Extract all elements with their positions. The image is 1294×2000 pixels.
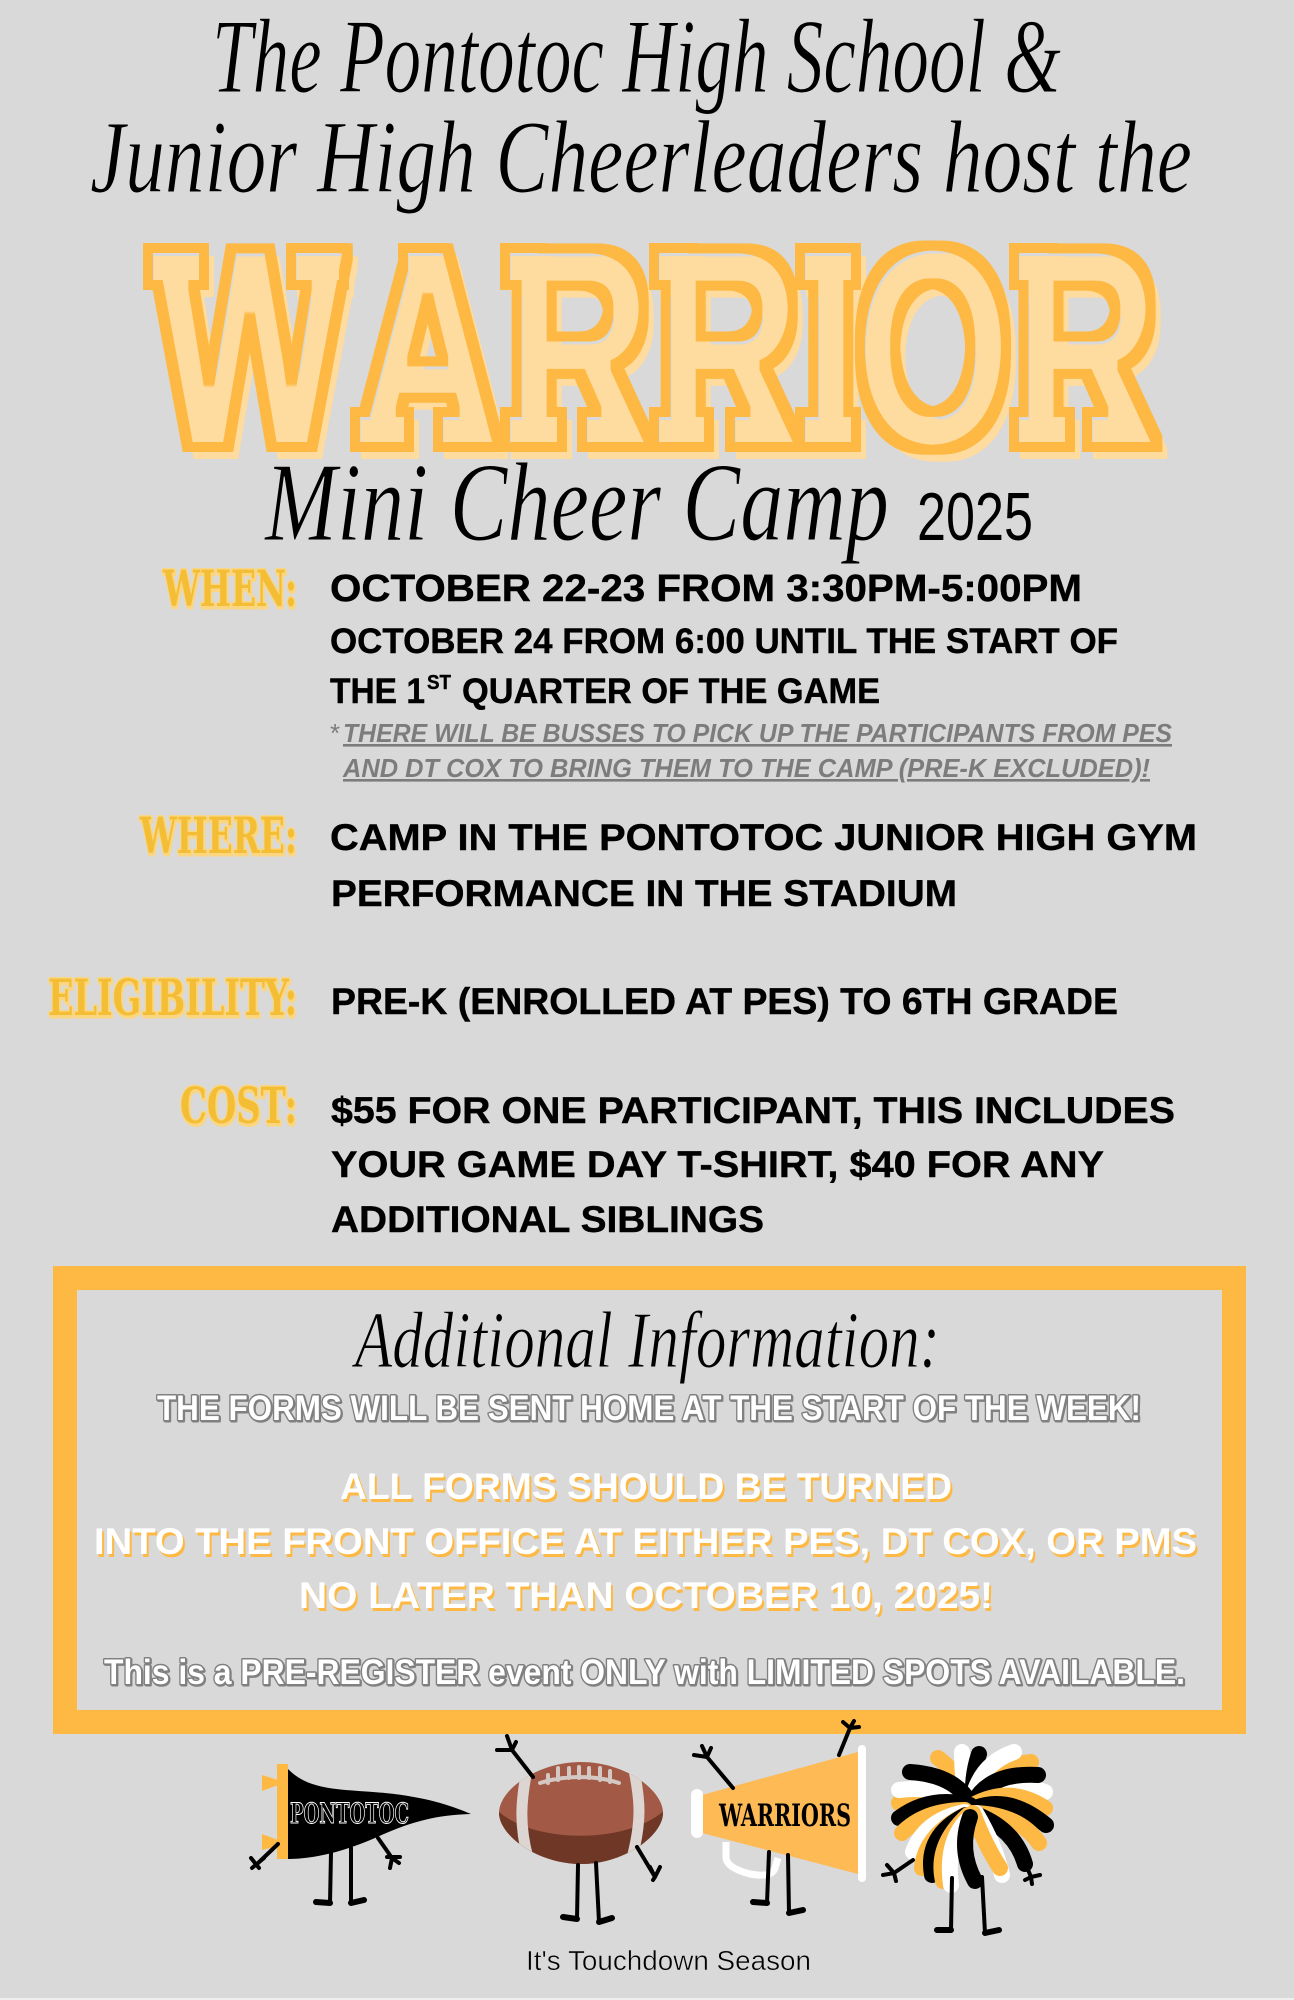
cost label: COST: (180, 1076, 297, 1135)
title: host line (90, 0, 1192, 215)
eligibility details: PRE-K (ENROLLED AT PES) TO 6TH GRADE (331, 981, 1118, 1022)
deadline callout: ALL FORMS SHOULD BE TURNED (340, 1466, 952, 1507)
when details: QUARTER OF THE GAME (462, 672, 880, 711)
icon: pennant (251, 1764, 471, 1903)
when details: OCTOBER 24 FROM 6:00 UNTIL THE START OF (330, 622, 1118, 661)
bus note: AND DT COX TO BRING THEM TO THE CAMP (PRE-K EXCLUDED)! (342, 753, 1150, 783)
icon: megaphone (691, 1721, 866, 1913)
where details: PERFORMANCE IN THE STADIUM (331, 873, 957, 914)
panel: additional information (65, 1278, 1234, 1722)
icon: megaphone: WARRIORS (718, 1798, 851, 1834)
when details: THE 1 (330, 672, 425, 711)
cost details (331, 1090, 1175, 1240)
deadline callout: INTO THE FRONT OFFICE AT EITHER PES, DT COX, OR PMS (94, 1521, 1197, 1562)
bus note (330, 718, 1173, 783)
where label: WHERE: (139, 806, 297, 865)
title: WARRIOR: WARRIOR (155, 190, 1159, 504)
icon: pennant: PONTOTOC (290, 1797, 409, 1830)
footer caption: It's Touchdown Season (526, 1945, 811, 1976)
bus note: THERE WILL BE BUSSES TO PICK UP THE PARTICIPANTS FROM PES (343, 718, 1173, 748)
bus note: * (330, 718, 340, 748)
cost details: YOUR GAME DAY T-SHIRT, $40 FOR ANY (331, 1144, 1104, 1185)
where details: CAMP IN THE PONTOTOC JUNIOR HIGH GYM (330, 817, 1197, 858)
where details (330, 817, 1197, 914)
forms sent home line: THE FORMS WILL BE SENT HOME AT THE START OF THE WEEK! (157, 1389, 1141, 1428)
eligibility label: ELIGIBILITY: (48, 968, 297, 1027)
when details (330, 568, 1118, 711)
when details: ST (427, 672, 451, 694)
subtitle: 2025 (917, 479, 1033, 555)
when label: WHEN: (162, 559, 297, 618)
cost details: $55 FOR ONE PARTICIPANT, THIS INCLUDES (331, 1090, 1175, 1131)
icon: football (495, 1736, 667, 1922)
deadline callout: NO LATER THAN OCTOBER 10, 2025! (299, 1575, 993, 1616)
pre-register line: This is a PRE-REGISTER event ONLY with LIMITED SPOTS AVAILABLE. (104, 1653, 1185, 1692)
icon: pom pom (883, 1752, 1046, 1933)
deadline callout (94, 1466, 1197, 1616)
cost details: ADDITIONAL SIBLINGS (331, 1199, 764, 1240)
subtitle: Mini Cheer Camp (263, 441, 889, 565)
when details: OCTOBER 22-23 FROM 3:30PM-5:00PM (330, 568, 1082, 610)
panel heading: Additional Information: (351, 1297, 940, 1385)
